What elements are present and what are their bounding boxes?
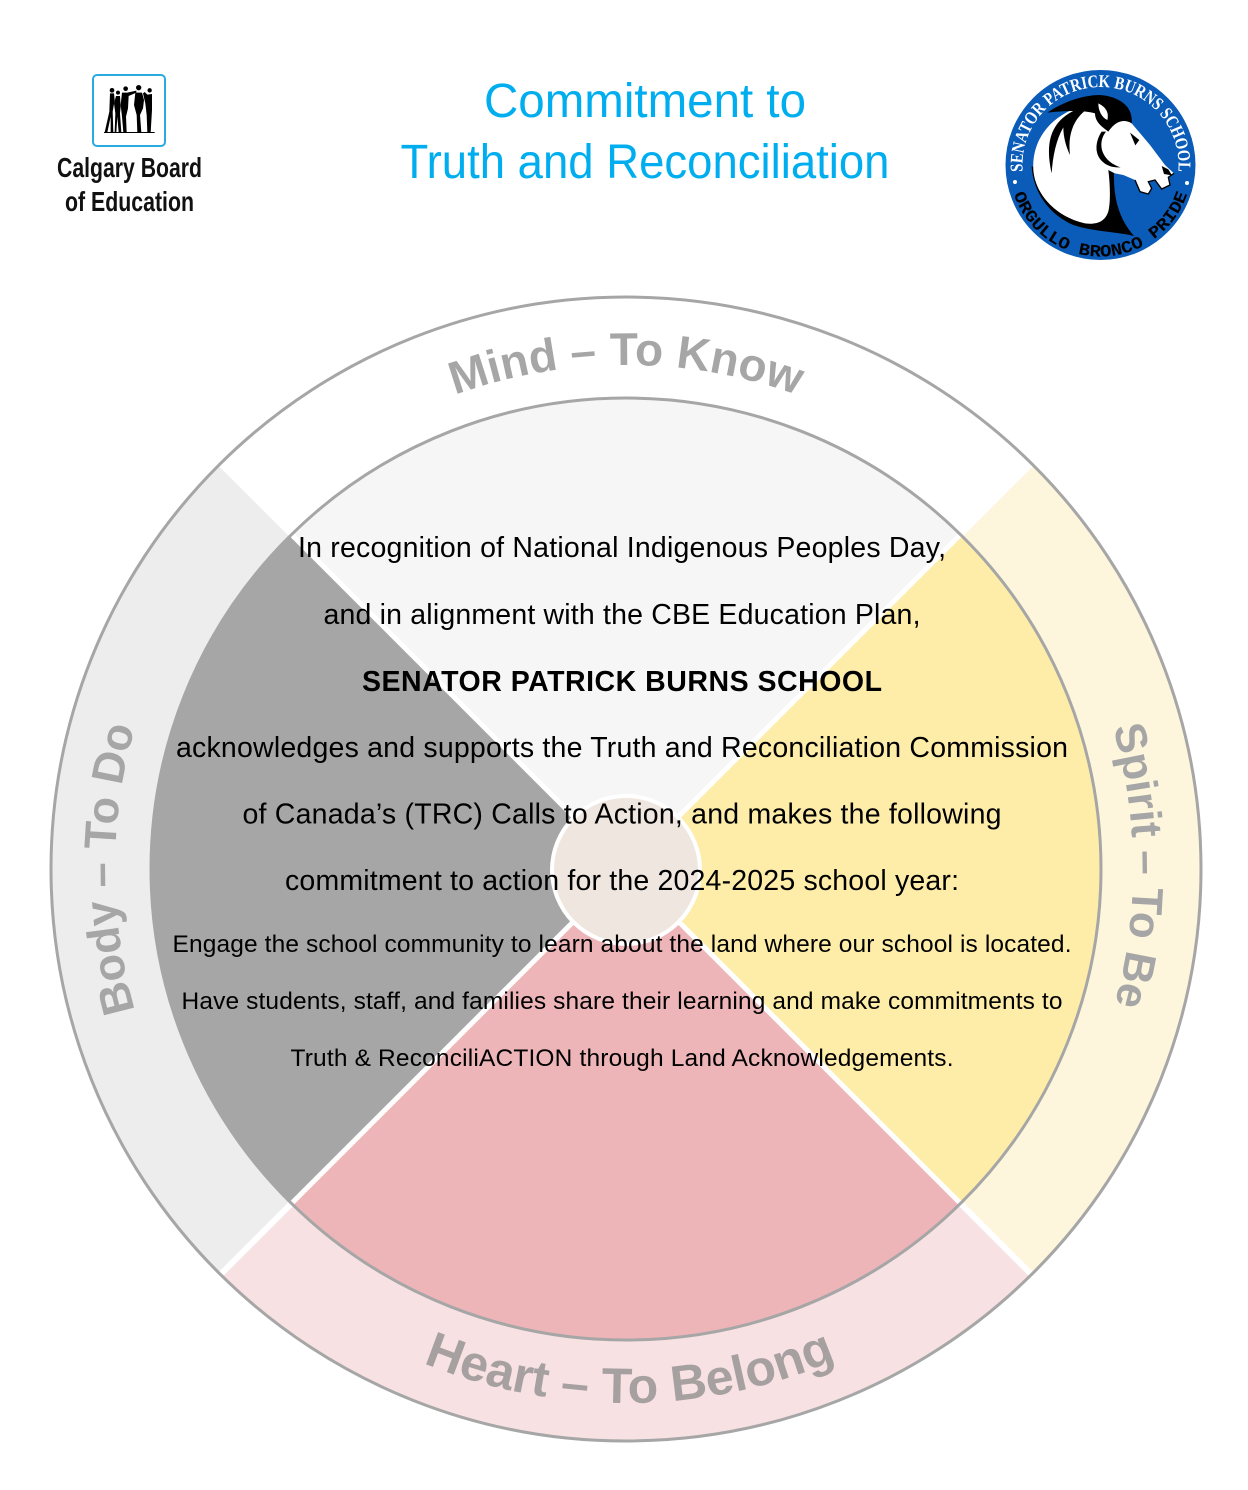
logo wordmark: Calgary Board bbox=[57, 152, 202, 183]
outer ring: Heart bbox=[220, 869, 1032, 1441]
text block: commitment statement: acknowledges and supports the Truth and Reconciliation Commission bbox=[176, 732, 1068, 764]
title: Commitment to bbox=[484, 75, 806, 128]
text block: actions: Have students, staff, and families share their learning and make commitments to bbox=[182, 988, 1062, 1015]
badge text: school name: SENATOR PATRICK BURNS SCHOOL bbox=[1010, 75, 1190, 172]
logo: Senator Patrick Burns School bbox=[1006, 70, 1196, 260]
logo: Calgary Board of Education bbox=[57, 75, 202, 217]
label: Spirit - To Be: Spirit – To Be bbox=[1112, 724, 1163, 1006]
outer ring: Mind bbox=[220, 297, 1032, 869]
center circle bbox=[552, 796, 700, 944]
text block: commitment statement: In recognition of National Indigenous Peoples Day, bbox=[298, 532, 946, 564]
inner quadrant: Body bbox=[151, 535, 626, 1203]
inner quadrant: Spirit bbox=[626, 535, 1101, 1203]
text block: actions: Engage the school community to learn about the land where our school is located. bbox=[172, 931, 1072, 958]
text block: commitment statement: of Canada’s (TRC) Calls to Action, and makes the following bbox=[242, 798, 1002, 830]
badge dots bbox=[1013, 180, 1189, 185]
outer ring: Body bbox=[51, 464, 626, 1274]
text block: commitment statement: SENATOR PATRICK BURNS SCHOOL bbox=[362, 666, 882, 698]
text block: actions bbox=[172, 931, 1072, 1072]
text block: commitment statement: and in alignment with the CBE Education Plan, bbox=[324, 599, 920, 631]
logo wordmark: of Education bbox=[65, 186, 194, 217]
title: Truth and Reconciliation bbox=[400, 136, 890, 189]
inner quadrant: Mind bbox=[292, 398, 960, 869]
label: Body - To Do: Body – To Do bbox=[84, 726, 134, 1016]
text block: commitment statement bbox=[176, 532, 1068, 897]
badge text: motto: ORGULLO BRONCO PRIDE bbox=[1015, 190, 1188, 257]
logo wordmark bbox=[57, 152, 202, 217]
outer ring: Spirit bbox=[626, 464, 1201, 1274]
inner quadrant: Heart bbox=[292, 869, 960, 1340]
title bbox=[400, 75, 890, 189]
label: Mind - To Know: Mind – To Know bbox=[448, 333, 805, 394]
text block: actions: Truth & ReconciliACTION through Land Acknowledgements. bbox=[290, 1045, 954, 1072]
icon: group of people bbox=[93, 75, 165, 146]
text block: commitment statement: commitment to action for the 2024-2025 school year: bbox=[285, 865, 959, 897]
panel: medicine wheel bbox=[50, 296, 1202, 1442]
label: Heart - To Belong: Heart – To Belong bbox=[426, 1332, 834, 1404]
badge circle bbox=[1005, 70, 1196, 260]
icon: bronco head bbox=[1032, 95, 1174, 236]
